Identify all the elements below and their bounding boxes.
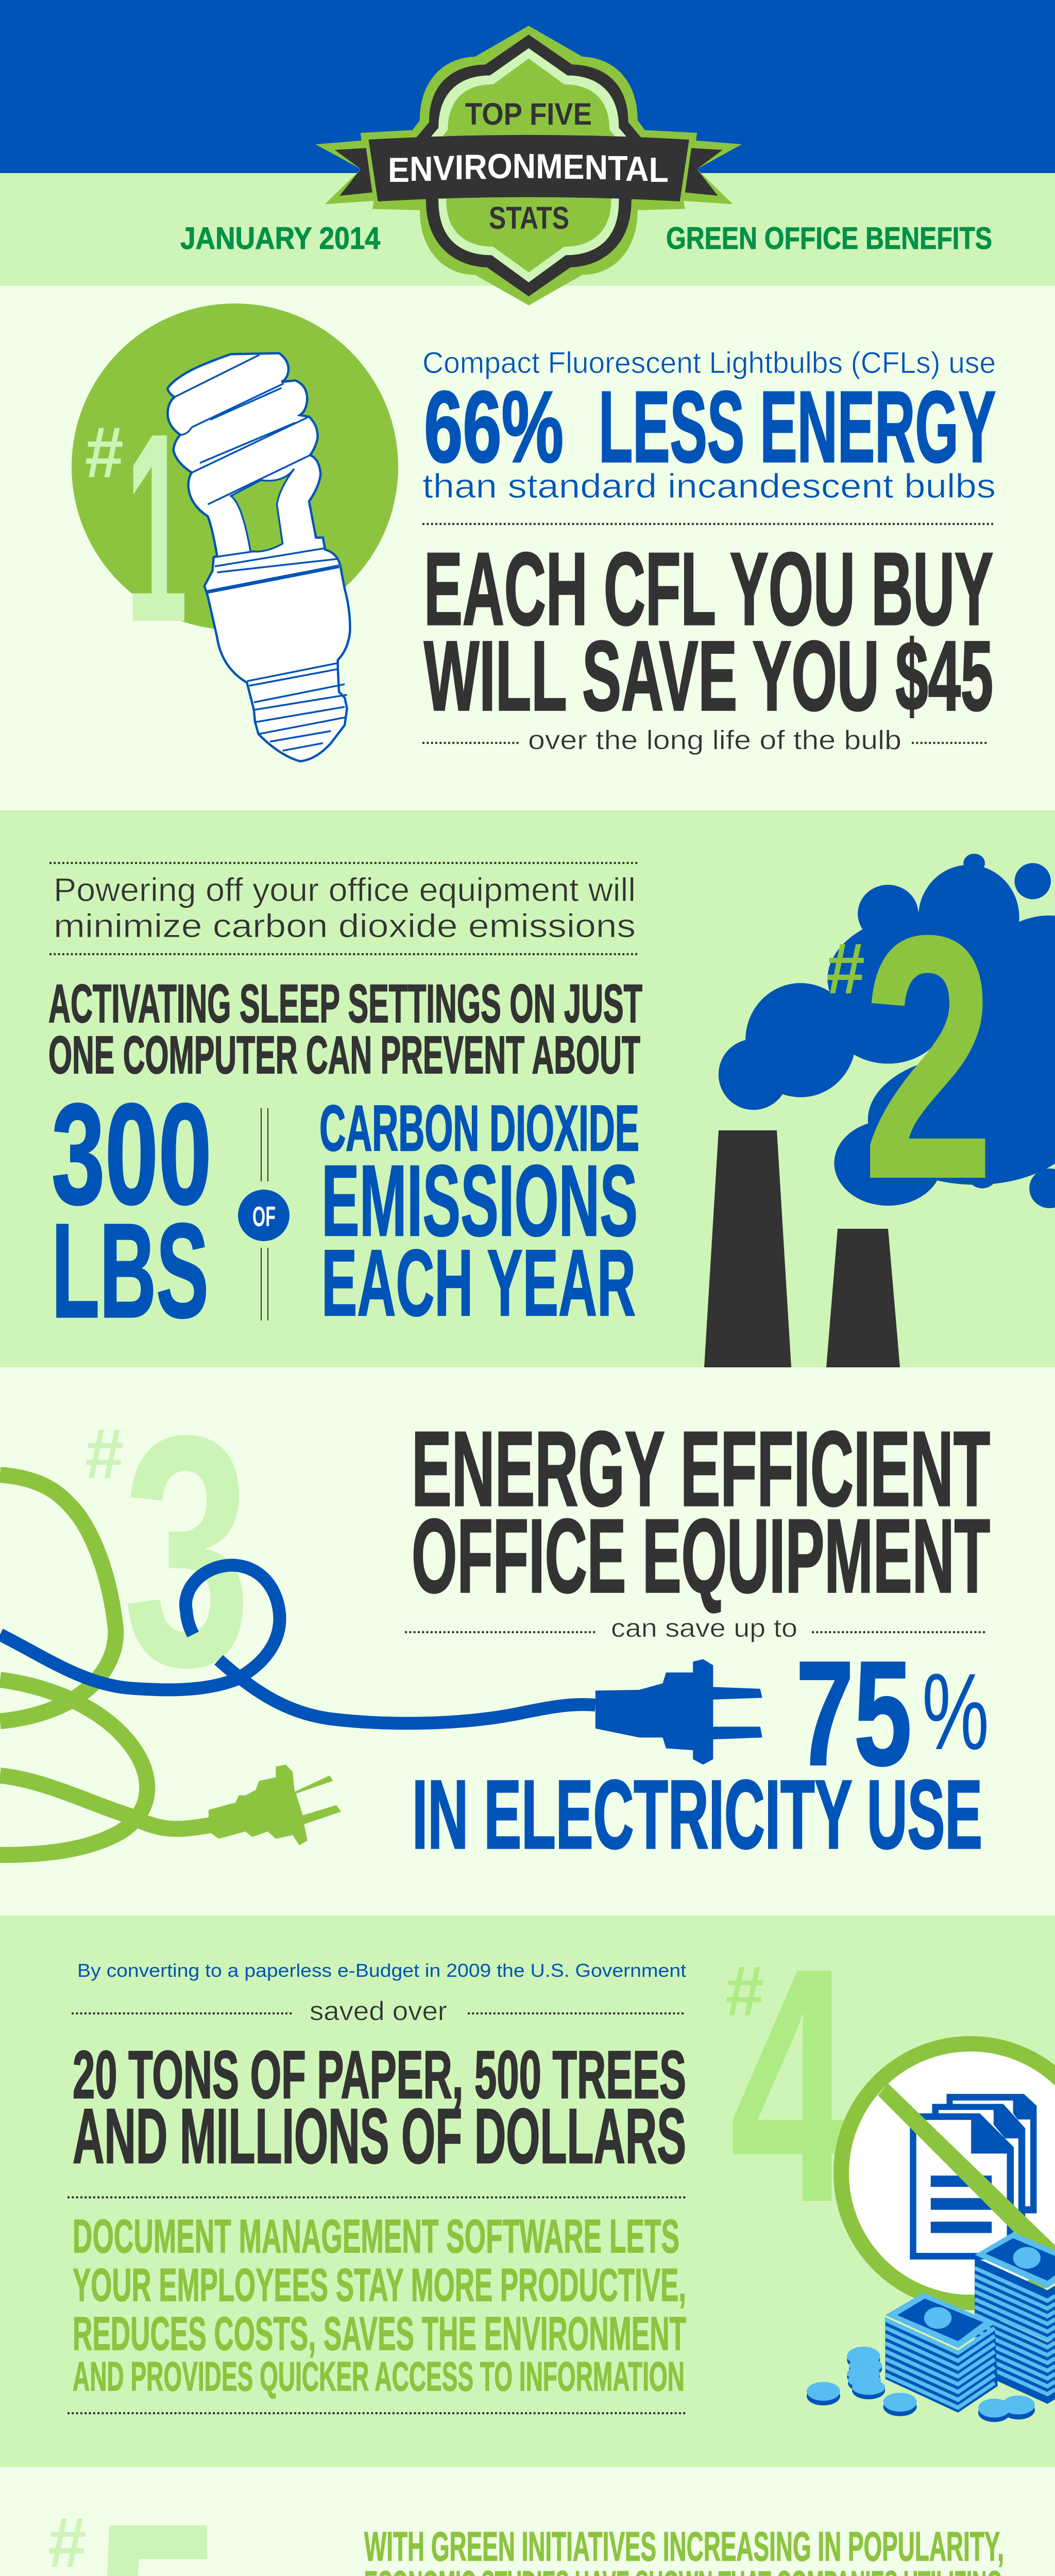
number: #3 <box>85 1367 251 1735</box>
number: #5 <box>48 2454 223 2576</box>
text: green office benefits: GREEN OFFICE BENEFITS <box>666 221 992 256</box>
icon: smoke cloud <box>719 854 1055 1208</box>
text: environmental: ENVIRONMENTAL <box>388 146 669 190</box>
stat: 300 lbs: 300 <box>52 1074 212 1234</box>
text: than standard bulbs: than standard incandescent bulbs <box>422 467 996 505</box>
badge: of: OF <box>252 1200 276 1232</box>
number: #2 <box>826 863 995 1252</box>
panel: stat 4 paperless <box>0 1898 1055 2467</box>
text: top five: TOP FIVE <box>465 97 592 131</box>
heading: energy efficient office equipment <box>412 1410 990 1615</box>
stat: 75%: 75 <box>796 1631 912 1797</box>
text: january 2014: JANUARY 2014 <box>180 221 381 256</box>
panel: header <box>0 0 1055 306</box>
number: #3: # <box>85 1414 124 1494</box>
badge: of <box>238 1190 290 1241</box>
heading: 66% less energy <box>424 370 996 483</box>
text: can save up to: can save up to <box>611 1614 797 1642</box>
icon: smokestacks <box>704 1130 900 1367</box>
panel: stat 1 CFL bulbs: 1 <box>126 377 188 678</box>
icon: left bill stack <box>886 2293 998 2413</box>
stat: carbon dioxide emissions each year: EACH YEAR <box>321 1230 636 1335</box>
number: #4: # <box>725 1952 764 2031</box>
text: powering off: minimize carbon dioxide emissions <box>54 907 636 944</box>
text: over the long life: over the long life of the bulb <box>528 725 901 755</box>
badge <box>315 26 742 306</box>
icon: green cords and plug <box>0 1475 341 1855</box>
panel: stat 3 efficient equipment <box>0 1367 1055 1916</box>
icon: green circle <box>72 303 398 630</box>
heading: 20 tons <box>73 2037 686 2179</box>
text: powering off: Powering off your office equipment will <box>54 871 636 908</box>
stat: 75%: % <box>922 1651 989 1772</box>
number: #1: # <box>85 412 124 493</box>
heading: each CFL saves $45 <box>424 532 993 731</box>
number: #3: 3 <box>123 1367 251 1735</box>
heading: activating sleep settings: ONE COMPUTER CAN PREVENT ABOUT <box>48 1025 640 1084</box>
stat: carbon dioxide emissions each year <box>319 1093 639 1335</box>
icon: coins <box>807 2347 1035 2422</box>
stat: 300 lbs: LBS <box>52 1196 209 1346</box>
icon: money stacks and coins <box>807 2232 1055 2422</box>
stat: carbon dioxide emissions each year: CARBON DIOXIDE <box>319 1093 639 1164</box>
number: #4 <box>725 1898 855 2272</box>
text: document management <box>73 2210 686 2399</box>
text: powering off <box>54 871 636 944</box>
panel: stat 1 CFL bulbs <box>0 286 1055 810</box>
panel: stat 5 profits <box>0 2454 1055 2576</box>
number: #1 <box>85 377 188 678</box>
icon: CFL light bulb <box>167 353 350 761</box>
heading: activating sleep settings <box>48 974 642 1084</box>
text: compact fluorescent: Compact Fluorescent Lightbulbs (CFLs) use <box>422 346 996 380</box>
number: #2: 2 <box>862 863 995 1252</box>
icon: right bill stack <box>975 2232 1055 2404</box>
icon: blue cord and plug <box>0 1565 762 1765</box>
text: saved over: saved over <box>310 1996 447 2026</box>
text: by converting: By converting to a paperless e-Budget in 2009 the U.S. Government <box>77 1960 686 1981</box>
number: #2: # <box>826 928 865 1009</box>
icon: documents <box>910 2094 1036 2260</box>
stat: carbon dioxide emissions each year: EMISSIONS <box>321 1144 638 1257</box>
panel: stat 2 sleep settings <box>0 810 1055 1367</box>
stat: 300 lbs <box>52 1074 212 1346</box>
number: #4: 4 <box>729 1898 855 2272</box>
heading: 66% less energy: 66% <box>424 370 564 483</box>
icon: no paper sign <box>841 2044 1055 2302</box>
text: stats: STATS <box>489 200 569 235</box>
